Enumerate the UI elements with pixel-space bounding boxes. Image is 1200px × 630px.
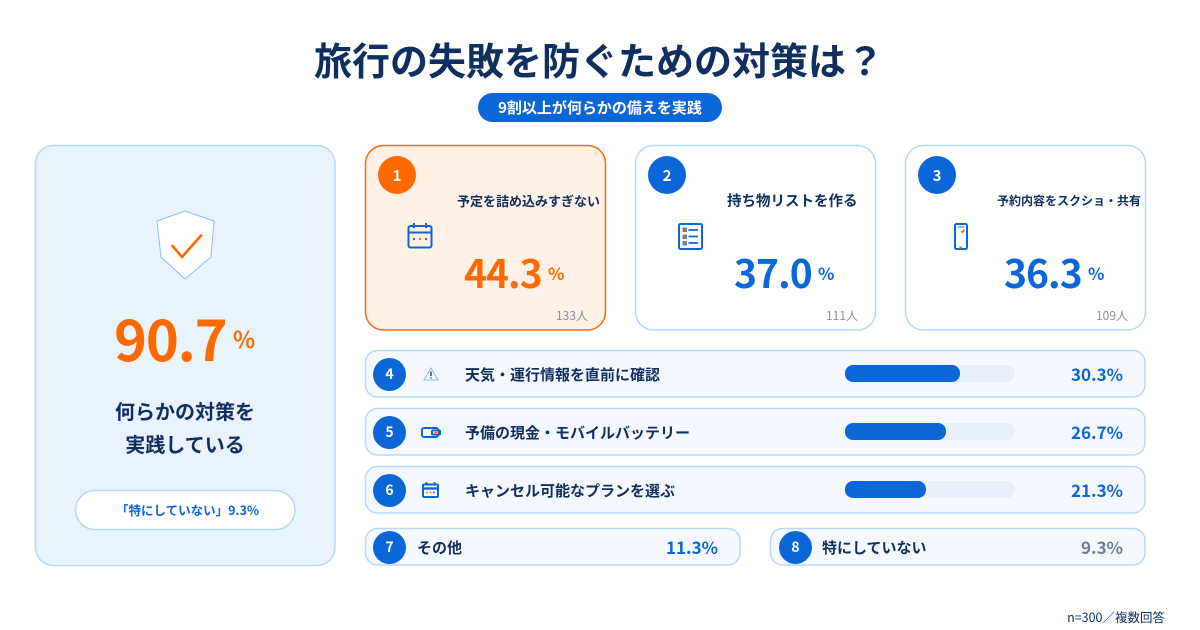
icon: wallet [421,427,441,438]
rank badge 2 [648,156,686,194]
label: その他 [417,537,462,558]
bar [845,365,1015,382]
bar [845,481,1015,498]
label: キャンセル可能なプランを選ぶ [465,480,675,501]
big figure 90.7%: 90.7 [114,297,227,378]
icon: calendar [408,223,432,248]
value: 9.3% [1081,534,1123,559]
icon: checklist [678,223,703,250]
unit: % [1088,260,1104,285]
rank badge 7 [373,531,406,564]
rank badge 2: 2 [663,165,671,186]
row: rank 5 [365,408,1145,455]
value: 21.3% [1071,477,1123,502]
value: 26.7% [1071,419,1123,444]
rank badge 6 [373,474,406,507]
subtitle pill [478,93,722,122]
count: 133人 [556,307,588,324]
bar [845,423,1015,440]
value: 37.0 [734,244,812,300]
row: rank 4 [365,350,1145,397]
rank badge 8 [779,531,812,564]
rank badge 4: 4 [385,364,394,384]
unit: % [818,260,834,285]
subtitle pill: 9割以上が何らかの備えを実践 [498,97,702,118]
row: rank 7 [365,528,740,565]
unit: % [548,260,564,285]
card: rank 1 [365,145,606,330]
rank badge 5 [373,416,406,449]
label: 予約内容をスクショ・共有 [997,192,1141,209]
value: 30.3% [1071,361,1123,386]
title: 旅行の失敗を防ぐための対策は？ [314,31,884,86]
icon: smartphone [954,223,968,250]
summary text [115,396,255,458]
label: 特にしていない [822,537,927,558]
rank badge 1 [378,156,416,194]
rank badge 5: 5 [385,422,394,442]
value: 11.3% [666,534,718,559]
label: 予備の現金・モバイルバッテリー [465,422,690,443]
count: 109人 [1096,307,1128,324]
summary text: 実践している [125,429,245,458]
label: 予定を詰め込みすぎない [457,191,600,210]
rank badge 1: 1 [393,165,401,186]
row: rank 6 [365,466,1145,513]
rank badge 3 [918,156,956,194]
card: rank 2 [635,145,876,330]
value: 36.3 [1004,244,1082,300]
label: 天気・運行情報を直前に確認 [465,364,660,385]
icon: calendar small [422,482,439,498]
card: rank 3 [905,145,1146,330]
footnote: n=300／複数回答 [1067,607,1165,626]
rank badge 8: 8 [791,537,800,557]
value: 44.3 [464,244,542,300]
rank badge 7: 7 [385,537,394,557]
summary text: 何らかの対策を [115,396,255,425]
rank badge 4 [373,358,406,391]
label: 持ち物リストを作る [727,190,858,211]
rank badge 6: 6 [385,480,394,500]
count: 111人 [826,307,858,324]
pill: no measures [75,490,296,530]
pill: no measures: 「特にしていない」9.3% [116,500,259,519]
row: rank 8 [770,528,1145,565]
icon: shield with check [156,210,214,280]
panel: overall summary [35,145,335,566]
big figure unit: % [233,321,255,355]
icon: warning [423,367,439,380]
rank badge 3: 3 [933,165,941,186]
